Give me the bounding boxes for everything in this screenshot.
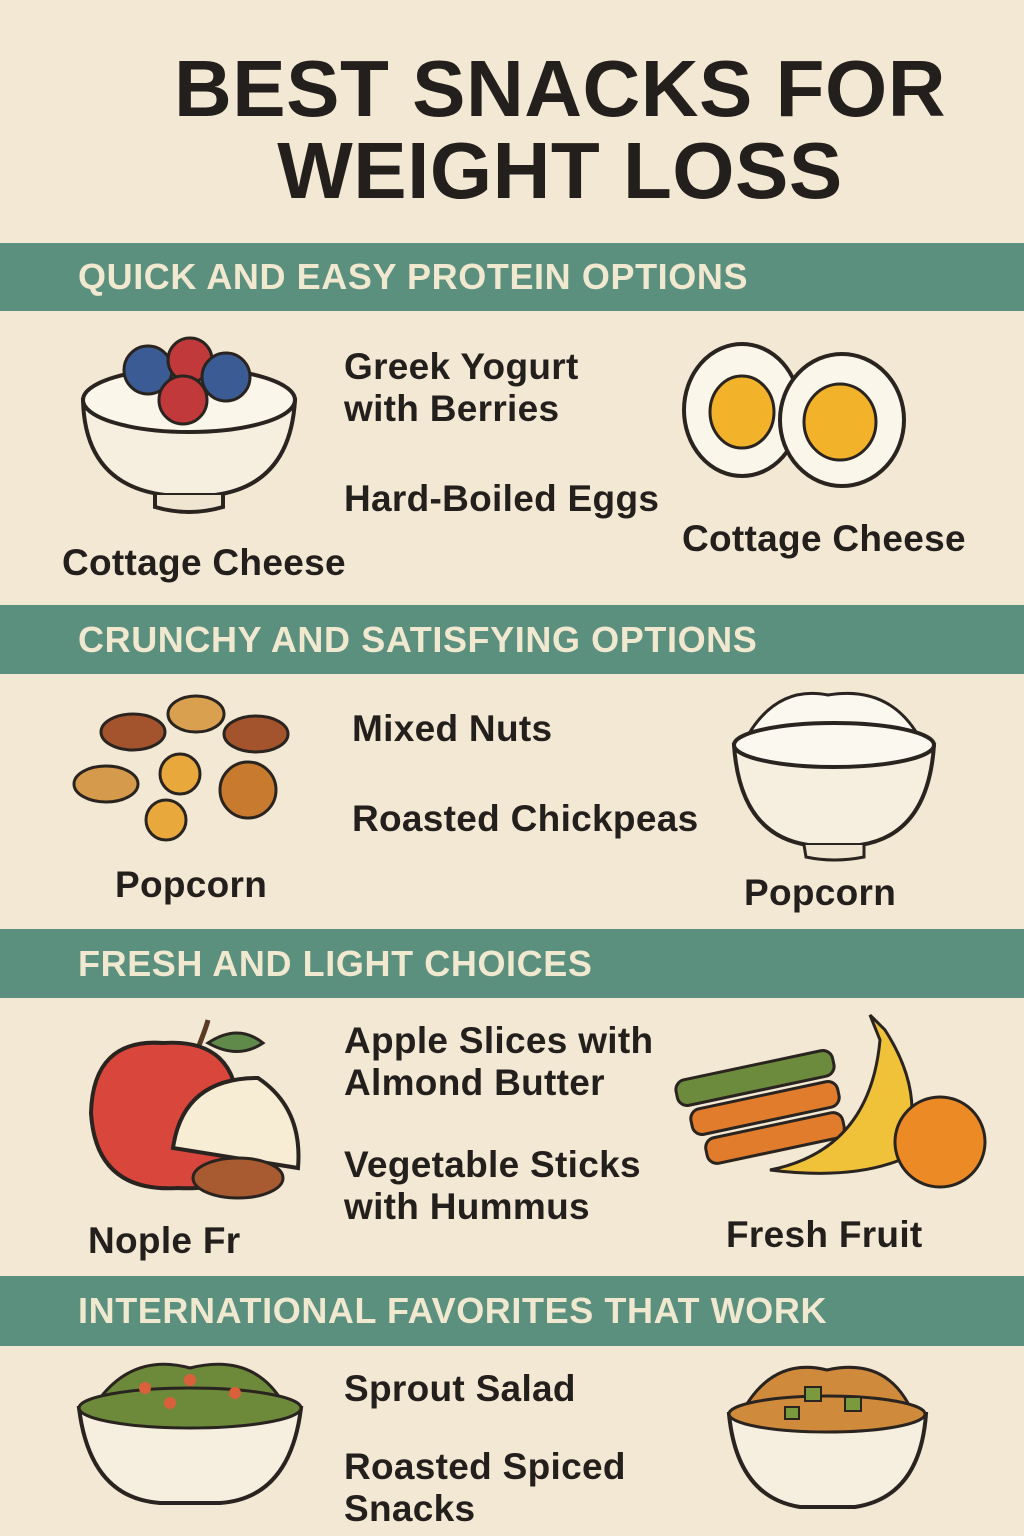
icon: mixed nuts <box>72 694 290 842</box>
band: international: INTERNATIONAL FAVORITES THAT WORK <box>78 1290 827 1331</box>
band: fresh <box>0 929 1024 998</box>
title: WEIGHT LOSS <box>277 126 843 215</box>
labels: Cottage Cheese <box>62 542 346 583</box>
band: protein <box>0 243 1024 311</box>
text: Cottage Cheese <box>682 518 966 559</box>
labels: Nople Fr <box>88 1220 240 1261</box>
text: with Hummus <box>344 1186 590 1227</box>
text: Fresh Fruit <box>726 1214 923 1255</box>
title <box>174 44 946 215</box>
text: Hard-Boiled Eggs <box>344 478 659 519</box>
icon: spiced snack bowl <box>726 1366 928 1509</box>
text: fresh items: Almond Butter <box>344 1062 605 1103</box>
icon: veggies and fruit <box>674 1014 986 1188</box>
icon: popcorn bowl <box>732 692 936 862</box>
text: Vegetable Sticks <box>344 1144 641 1185</box>
icon: apple <box>89 1019 300 1200</box>
text: Roasted Spiced <box>344 1446 626 1487</box>
band: international <box>0 1276 1024 1346</box>
band: protein: QUICK AND EASY PROTEIN OPTIONS <box>78 256 748 297</box>
title: BEST SNACKS FOR <box>174 44 946 133</box>
text: Popcorn <box>744 872 896 913</box>
text: fresh items <box>344 1020 653 1103</box>
text: fresh items: Apple Slices with <box>344 1020 653 1061</box>
icon: sprout salad <box>76 1362 304 1505</box>
text: Roasted Chickpeas <box>352 798 698 839</box>
text: Snacks <box>344 1488 475 1529</box>
text: protein items <box>344 346 579 429</box>
band: fresh: FRESH AND LIGHT CHOICES <box>78 942 592 984</box>
text: protein items: with Berries <box>344 388 559 429</box>
icon: yogurt bowl <box>80 336 298 514</box>
text: protein items: Greek Yogurt <box>344 346 579 387</box>
band: crunchy: CRUNCHY AND SATISFYING OPTIONS <box>78 618 757 660</box>
icon: eggs <box>682 342 906 488</box>
text: crunchy items: Mixed Nuts <box>352 708 552 749</box>
band: crunchy <box>0 605 1024 674</box>
labels: Popcorn <box>115 864 267 905</box>
text: international items: Sprout Salad <box>344 1368 576 1409</box>
